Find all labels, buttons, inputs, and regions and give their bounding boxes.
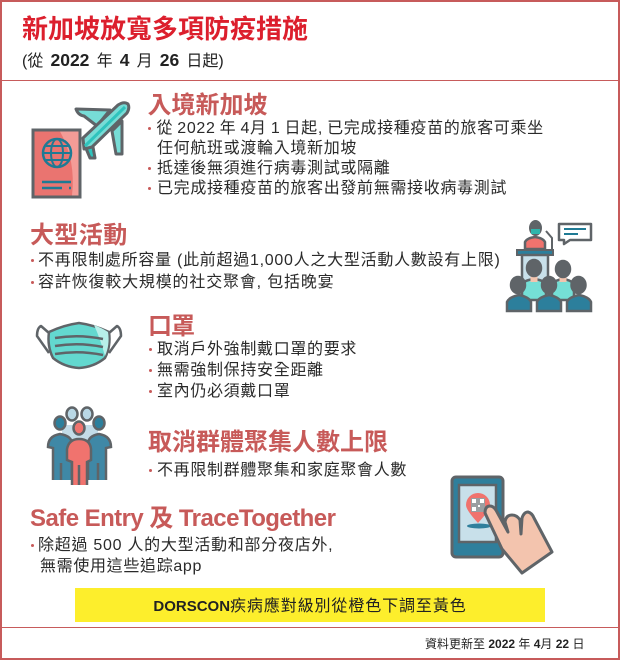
list: event rules: [31, 251, 501, 291]
heading: gathering limits: 取消群體聚集人數上限: [148, 429, 388, 456]
list: gathering rules: 不再限制群體聚集和家庭聚會人數: [157, 462, 407, 479]
list: tracking rules: 除超過 500 人的大型活動和部分夜店外,: [38, 537, 333, 554]
panel: Safe Entry and TraceTogether: [30, 505, 336, 575]
list: entry rules: 任何航班或渡輪入境新加坡: [157, 140, 357, 157]
list: tracking rules: [31, 536, 333, 575]
list: event rules: 容許恢復較大規模的社交聚會, 包括晚宴: [38, 274, 334, 291]
icon: group of people: [46, 406, 112, 485]
heading: entry: 入境新加坡: [148, 92, 268, 119]
title: 新加坡放寬多項防疫措施: [22, 14, 308, 44]
panel: masks: [148, 313, 357, 400]
panel: entry: [148, 92, 544, 197]
list: entry rules: 抵達後無須進行病毒測試或隔離: [157, 160, 390, 177]
icon: face mask: [36, 322, 122, 370]
icon: phone with QR code and hand: [450, 476, 554, 575]
callout: DORSCON level: DORSCON疾病應對級別從橙色下調至黃色: [153, 598, 467, 615]
subtitle: effective date: (從 2022 年 4 月 26 日起): [22, 50, 224, 70]
heading: Safe Entry: Safe Entry 及 TraceTogether: [30, 505, 335, 532]
icon: passport and plane: [32, 101, 130, 198]
footer: update date: 資料更新至 2022 年 4月 22 日: [425, 637, 584, 651]
list: entry rules: [148, 119, 544, 197]
panel: gathering limits: [148, 429, 407, 479]
list: mask rules: 室內仍必須戴口罩: [157, 383, 290, 400]
list: mask rules: 無需強制保持安全距離: [157, 362, 324, 379]
heading: masks: 口罩: [148, 313, 194, 340]
heading: large events: 大型活動: [30, 222, 128, 249]
callout: DORSCON level: [75, 588, 545, 622]
list: tracking rules: 無需使用這些追踪app: [40, 558, 202, 575]
list: mask rules: 取消戶外強制戴口罩的要求: [157, 341, 357, 358]
list: entry rules: 從 2022 年 4月 1 日起, 已完成接種疫苗的旅客可乘坐: [156, 120, 544, 137]
panel: large events: [30, 222, 501, 291]
list: mask rules: [149, 340, 357, 400]
icon: speaker and audience: [506, 220, 592, 312]
list: event rules: 不再限制處所容量 (此前超過1,000人之大型活動人數設有上限): [38, 252, 501, 269]
list: entry rules: 已完成接種疫苗的旅客出發前無需接收病毒測試: [157, 180, 507, 197]
